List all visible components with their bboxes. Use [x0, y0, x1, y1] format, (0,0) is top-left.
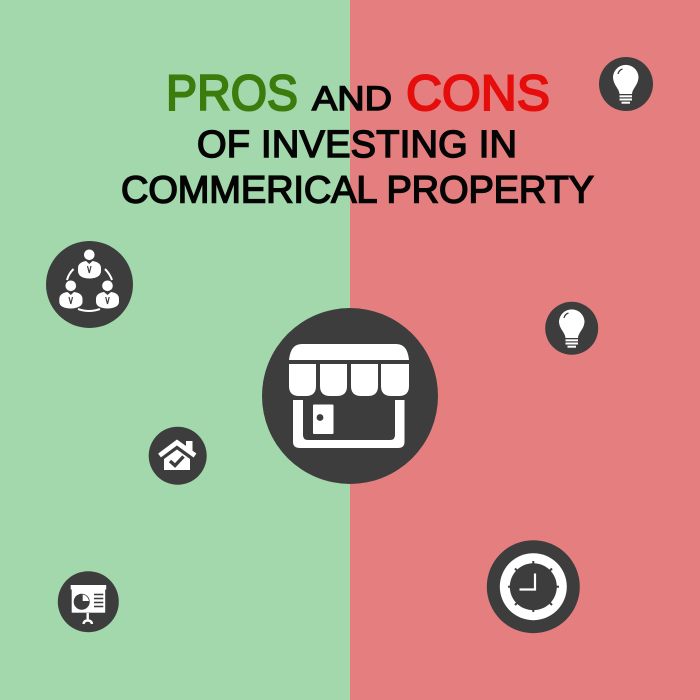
- heading word: and: AND: [312, 80, 392, 118]
- title: [121, 65, 594, 212]
- icon: presentation board: [58, 571, 119, 632]
- heading word: cons: CONS: [406, 65, 550, 121]
- icon: light bulb middle: [545, 302, 598, 355]
- icon: light bulb top: [599, 57, 653, 111]
- heading line: of investing in: OF INVESTING IN: [197, 124, 517, 166]
- icon: house with check mark: [149, 427, 207, 485]
- icon: clock: [487, 540, 580, 633]
- icon: team of people: [46, 241, 133, 328]
- panel: pros background: [0, 0, 350, 700]
- heading line: commerical property: COMMERICAL PROPERTY: [121, 170, 594, 212]
- icon: storefront: [262, 308, 438, 484]
- heading word: pros: PROS: [166, 65, 298, 121]
- panel: cons background: [350, 0, 700, 700]
